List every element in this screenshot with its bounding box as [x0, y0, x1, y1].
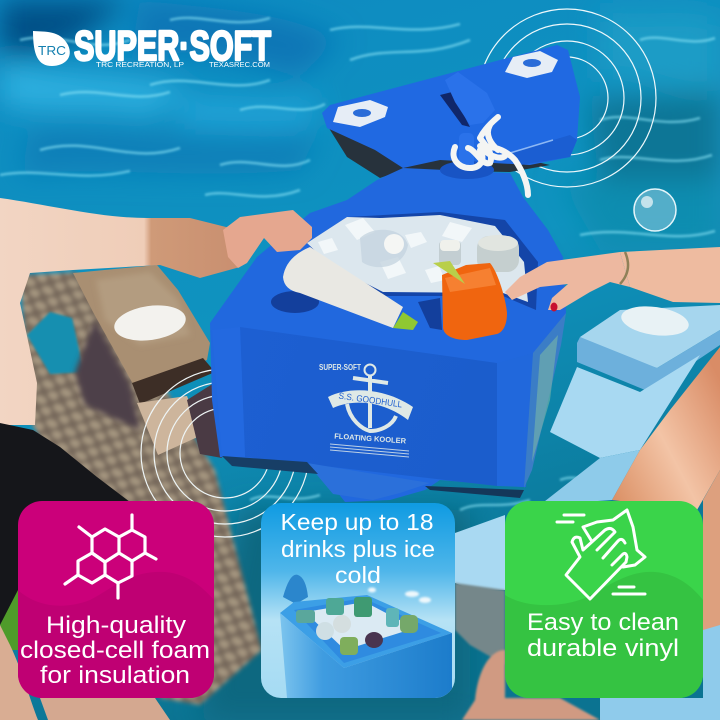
card: easy to clean — [505, 501, 703, 698]
upper blue float — [580, 305, 720, 368]
card text: Easy to clean — [527, 609, 679, 636]
cup holders — [271, 291, 319, 313]
card text: for insulation — [40, 662, 190, 689]
logo: TEXASREC.COM — [209, 60, 270, 69]
card text: cold — [335, 562, 381, 588]
float armrest — [73, 265, 210, 384]
cooler reflective side — [524, 313, 566, 488]
cooler body — [210, 168, 566, 502]
card text: High-quality — [46, 612, 186, 639]
rope — [453, 117, 528, 195]
ice — [307, 215, 528, 302]
card text: Keep up to 18 — [280, 509, 434, 535]
tail badges — [333, 100, 388, 127]
logo: TRC — [38, 43, 66, 58]
logo: SUPER·SOFT — [74, 22, 271, 69]
lower blue float — [550, 355, 700, 458]
cooler bottom drip — [307, 463, 430, 500]
card photo: mini cooler — [280, 575, 452, 698]
orange drink — [442, 263, 507, 340]
post and ring — [440, 161, 494, 179]
cooler front panel — [240, 327, 497, 486]
woven float — [20, 272, 262, 705]
card text: durable vinyl — [527, 635, 679, 662]
swimmer arm and torso — [0, 198, 240, 425]
anchor logo — [319, 363, 413, 457]
bubble — [634, 189, 676, 231]
right leg — [612, 347, 720, 510]
floating cooler — [210, 45, 580, 502]
left swimmer and lounge float — [0, 198, 262, 720]
anchor logo: SUPER-SOFT — [319, 363, 361, 372]
anchor logo: FLOATING KOOLER — [334, 432, 407, 446]
logo: TRC RECREATION, LP — [96, 60, 184, 69]
card: closed-cell foam — [18, 501, 214, 698]
card text — [280, 509, 435, 588]
icon: hand wiping — [557, 510, 645, 599]
left hand — [223, 210, 312, 268]
water through the weave — [27, 312, 84, 374]
card text — [527, 609, 679, 662]
anchor logo: S.S. GOODHULL — [338, 391, 403, 409]
swim shorts — [0, 423, 130, 625]
logo badge — [33, 31, 70, 66]
card: drinks capacity — [261, 503, 455, 698]
icon: molecule hexagons — [65, 515, 156, 598]
sound-wave rings bottom left — [141, 369, 309, 537]
card text: closed-cell foam — [20, 637, 210, 664]
right hand — [505, 252, 630, 312]
tail handle — [440, 92, 470, 127]
logo — [33, 22, 271, 69]
card text: drinks plus ice — [281, 536, 435, 562]
right side float and swimmer — [455, 247, 720, 720]
ice opening rim — [307, 212, 538, 310]
white bottle — [283, 247, 403, 328]
sound-wave rings top right — [478, 9, 656, 187]
cooler tail — [322, 45, 580, 178]
card text — [20, 612, 210, 689]
right arm — [620, 247, 720, 303]
